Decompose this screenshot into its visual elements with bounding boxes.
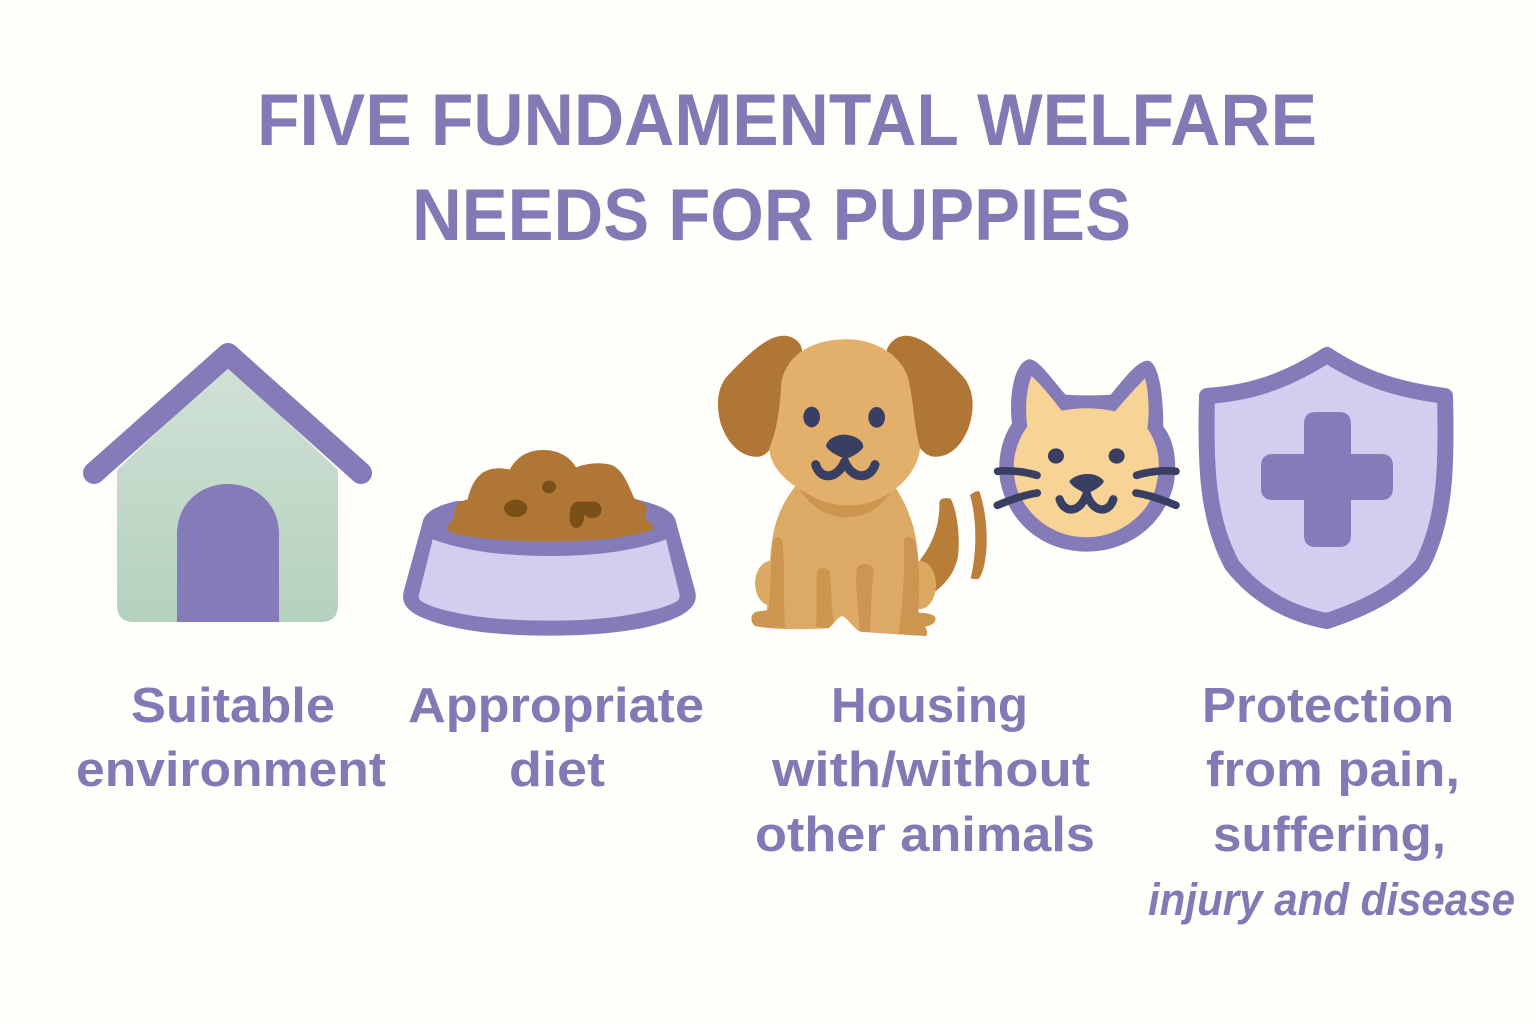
- label: appropriate diet: [408, 679, 704, 797]
- cat mouth: [1060, 494, 1113, 509]
- whiskers: [997, 471, 1176, 505]
- label: protection from pain, suffering, injury and disease: suffering,: [1213, 808, 1446, 862]
- nose: [826, 435, 863, 459]
- body: [751, 487, 936, 636]
- icon: food bowl: [403, 450, 696, 636]
- icon: cat: [997, 359, 1176, 552]
- cat nose: [1069, 474, 1104, 494]
- label: appropriate diet: diet: [509, 743, 605, 797]
- label: suitable environment: [76, 679, 386, 797]
- icon: dog house: [94, 354, 361, 622]
- wag mark: [970, 491, 987, 579]
- label: protection from pain, suffering, injury and disease: injury and disease: [1148, 874, 1515, 925]
- icon: puppy: [718, 336, 987, 636]
- label: protection from pain, suffering, injury and disease: from pain,: [1206, 743, 1460, 797]
- label: housing with/without other animals: other animals: [755, 808, 1095, 862]
- label: suitable environment: environment: [76, 743, 386, 797]
- title: [257, 80, 1317, 256]
- title: FIVE FUNDAMENTAL WELFARE: [257, 80, 1317, 161]
- haunches: [755, 561, 788, 606]
- cat eyes: [1048, 448, 1064, 464]
- label: protection from pain, suffering, injury and disease: Protection: [1202, 679, 1454, 733]
- head: [769, 339, 920, 505]
- label: housing with/without other animals: [755, 679, 1095, 862]
- icon: shield with cross: [1206, 355, 1446, 621]
- food: [447, 450, 653, 542]
- label: protection from pain, suffering, injury and disease: [1148, 679, 1515, 925]
- tail: [920, 498, 959, 592]
- ears: [718, 336, 802, 457]
- mouth: [816, 462, 875, 476]
- label: housing with/without other animals: Housing: [831, 679, 1028, 733]
- legs and collar shading: [751, 537, 785, 628]
- title: NEEDS FOR PUPPIES: [412, 175, 1131, 256]
- label: appropriate diet: Appropriate: [408, 679, 704, 733]
- label: suitable environment: Suitable: [131, 679, 335, 733]
- label: housing with/without other animals: with/without: [771, 743, 1090, 797]
- eyes: [803, 407, 820, 427]
